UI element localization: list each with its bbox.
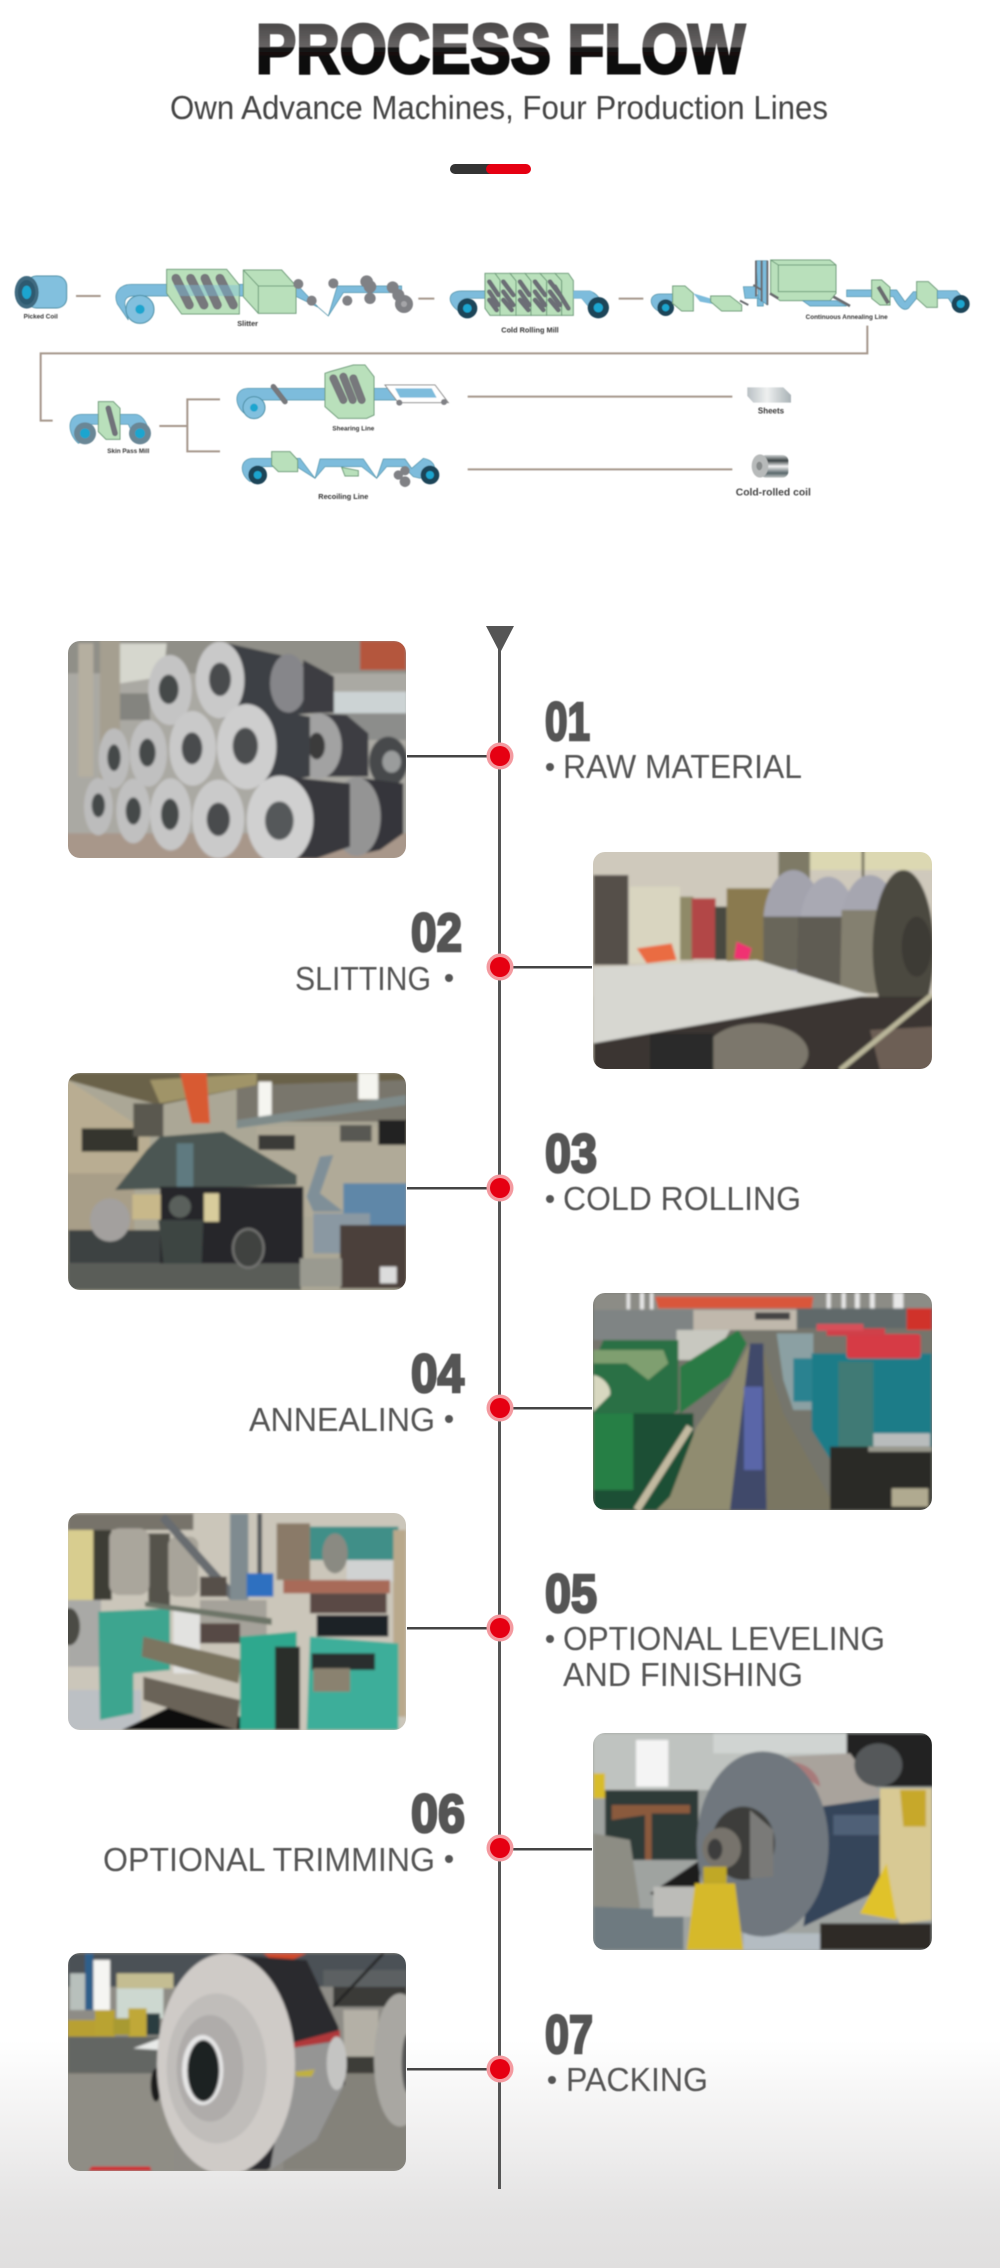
process flow diagram: [15, 260, 970, 501]
number: 01: [545, 692, 590, 752]
step 02: slitting: [295, 848, 937, 1083]
output: cold-rolled coil: [736, 454, 811, 499]
step 07: packing: [63, 1950, 708, 2175]
skin pass mill: [70, 402, 151, 455]
label: PACKING: [566, 2061, 708, 2098]
label: RAW MATERIAL: [563, 748, 802, 785]
label: [546, 1620, 885, 1693]
connector and node: [407, 1174, 514, 1202]
number: 03: [545, 1124, 597, 1184]
number: 05: [545, 1564, 597, 1624]
shearing line: Shearing Line: [332, 425, 375, 432]
skin pass mill: Skin Pass Mill: [107, 448, 150, 455]
slitter: Slitter: [237, 319, 258, 328]
step 01: raw material: [63, 637, 802, 864]
photo: rolling mill: [63, 1070, 410, 1293]
continuous annealing line: Continuous Annealing Line: [806, 314, 888, 321]
cold rolling mill: Cold Rolling Mill: [501, 325, 559, 334]
label: OPTIONAL LEVELING: [563, 1620, 885, 1657]
photo: finished coil: [63, 1950, 426, 2175]
label: ANNEALING: [249, 1401, 435, 1438]
photo: annealing line: [590, 1290, 937, 1513]
label: OPTIONAL TRIMMING: [103, 1841, 435, 1878]
shearing line: [237, 365, 448, 432]
photo: stacked steel coils: [63, 637, 410, 864]
photo: leveling machine: [59, 1510, 410, 1733]
picked coil: Picked Coil: [24, 314, 58, 321]
step 06: optional trimming: [103, 1730, 937, 1953]
step 03: cold rolling: [63, 1070, 801, 1293]
label: COLD ROLLING: [563, 1180, 801, 1217]
photo: coil on trimming line: [590, 1730, 937, 1953]
mid row: [369, 737, 408, 787]
bottom row: [357, 777, 403, 855]
connector and node: [486, 1394, 592, 1422]
photo: slitting machine: [590, 848, 937, 1083]
number: 07: [545, 2005, 593, 2065]
number: 06: [411, 1784, 465, 1844]
slitter: [116, 269, 413, 328]
recoiling line: Recoiling Line: [318, 492, 368, 501]
output: cold-rolled coil: Cold-rolled coil: [736, 488, 811, 499]
continuous annealing line: [651, 260, 970, 321]
step 04: annealing: [249, 1290, 937, 1513]
cold rolling mill: [450, 273, 609, 334]
output: sheets: [747, 387, 791, 416]
title: PROCESS FLOW: [256, 10, 745, 88]
timeline spine: [486, 626, 514, 2189]
step 05: optional leveling and finishing: [59, 1510, 885, 1733]
connector lines: [41, 296, 867, 469]
label: AND FINISHING: [563, 1656, 803, 1693]
connector and node: [486, 954, 592, 980]
back row: [228, 642, 309, 716]
subtitle: Own Advance Machines, Four Production Lines: [170, 89, 828, 126]
number: 04: [411, 1344, 464, 1404]
title accent bar: [450, 164, 531, 174]
label: SLITTING: [295, 960, 431, 997]
connector and node: [407, 742, 514, 770]
output: sheets: Sheets: [758, 407, 785, 416]
recoiling line: [242, 452, 439, 501]
connector and node: [407, 2056, 514, 2082]
connector and node: [486, 1834, 592, 1862]
connector and node: [407, 1614, 514, 1642]
number: 02: [411, 903, 462, 963]
picked coil: [15, 276, 67, 321]
